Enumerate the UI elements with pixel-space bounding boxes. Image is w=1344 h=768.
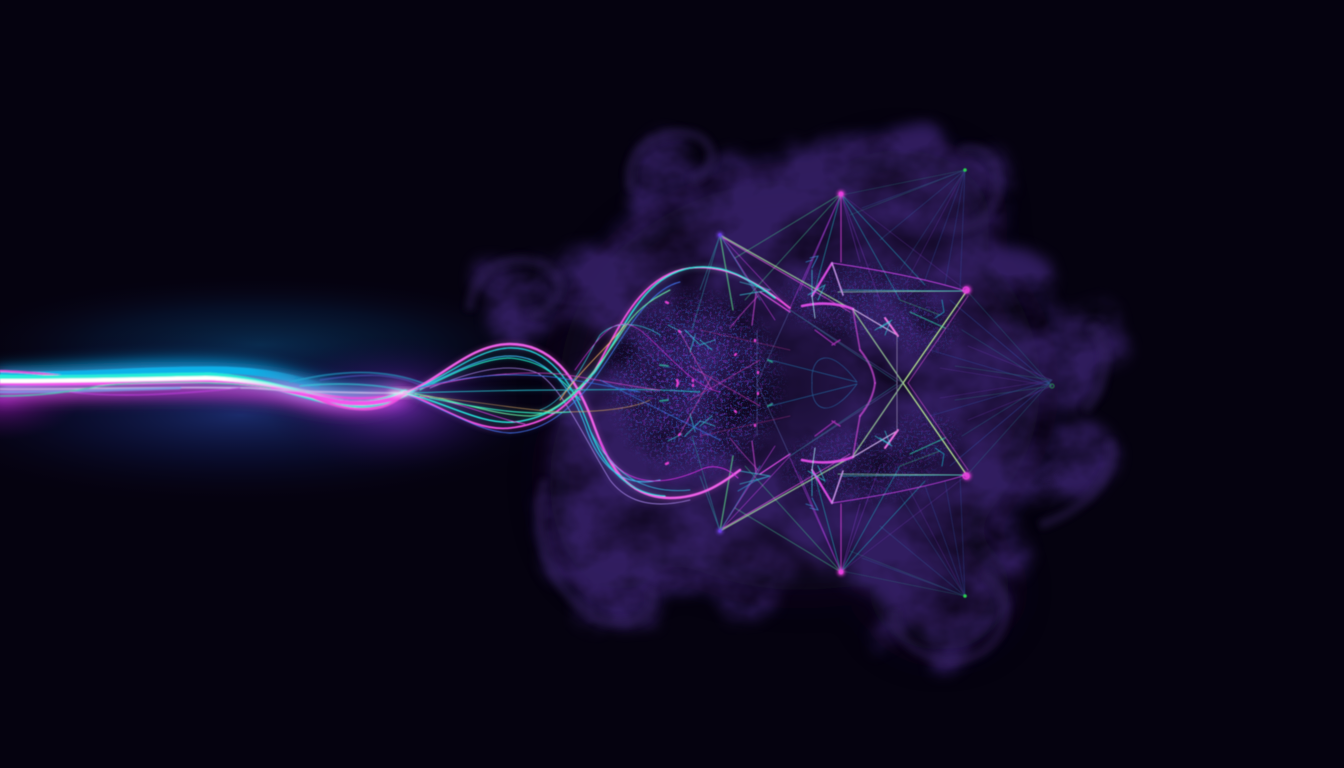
fan lines from top magenta node (735, 194, 967, 308)
strands fanning out, middle (405, 324, 720, 491)
network: mirrored lower half (660, 346, 1052, 598)
dark hollow at network centre (735, 308, 865, 458)
strand glow (0, 370, 405, 405)
illustration: light beam unravelling into a geometric network inside smoke (0, 116, 1135, 679)
bright star lines (720, 235, 968, 383)
geometric network (660, 168, 1054, 598)
smoke cloud (468, 133, 1117, 665)
inner magenta ring (730, 263, 898, 383)
fan lines from upper-left node (692, 235, 790, 330)
network nodes (717, 190, 971, 294)
light strands (0, 267, 790, 504)
magenta points (666, 302, 758, 383)
fanning strands (405, 267, 790, 504)
strand bands (0, 370, 425, 409)
network: upper half (660, 168, 1052, 420)
inner star web (680, 300, 945, 400)
smoke curls (470, 133, 1112, 660)
strands fanning out, lower loop (405, 267, 790, 433)
faint fan lines from far right node (930, 291, 1052, 420)
loop glow (405, 267, 790, 504)
strands fanning out, upper loop (405, 344, 740, 504)
beam ambient glow (0, 275, 580, 505)
white convergence point (388, 390, 416, 396)
speckled network dust (606, 262, 960, 504)
faint fan lines from top green node (842, 170, 965, 290)
cyan clusters (660, 256, 944, 366)
far right node (1050, 384, 1054, 388)
